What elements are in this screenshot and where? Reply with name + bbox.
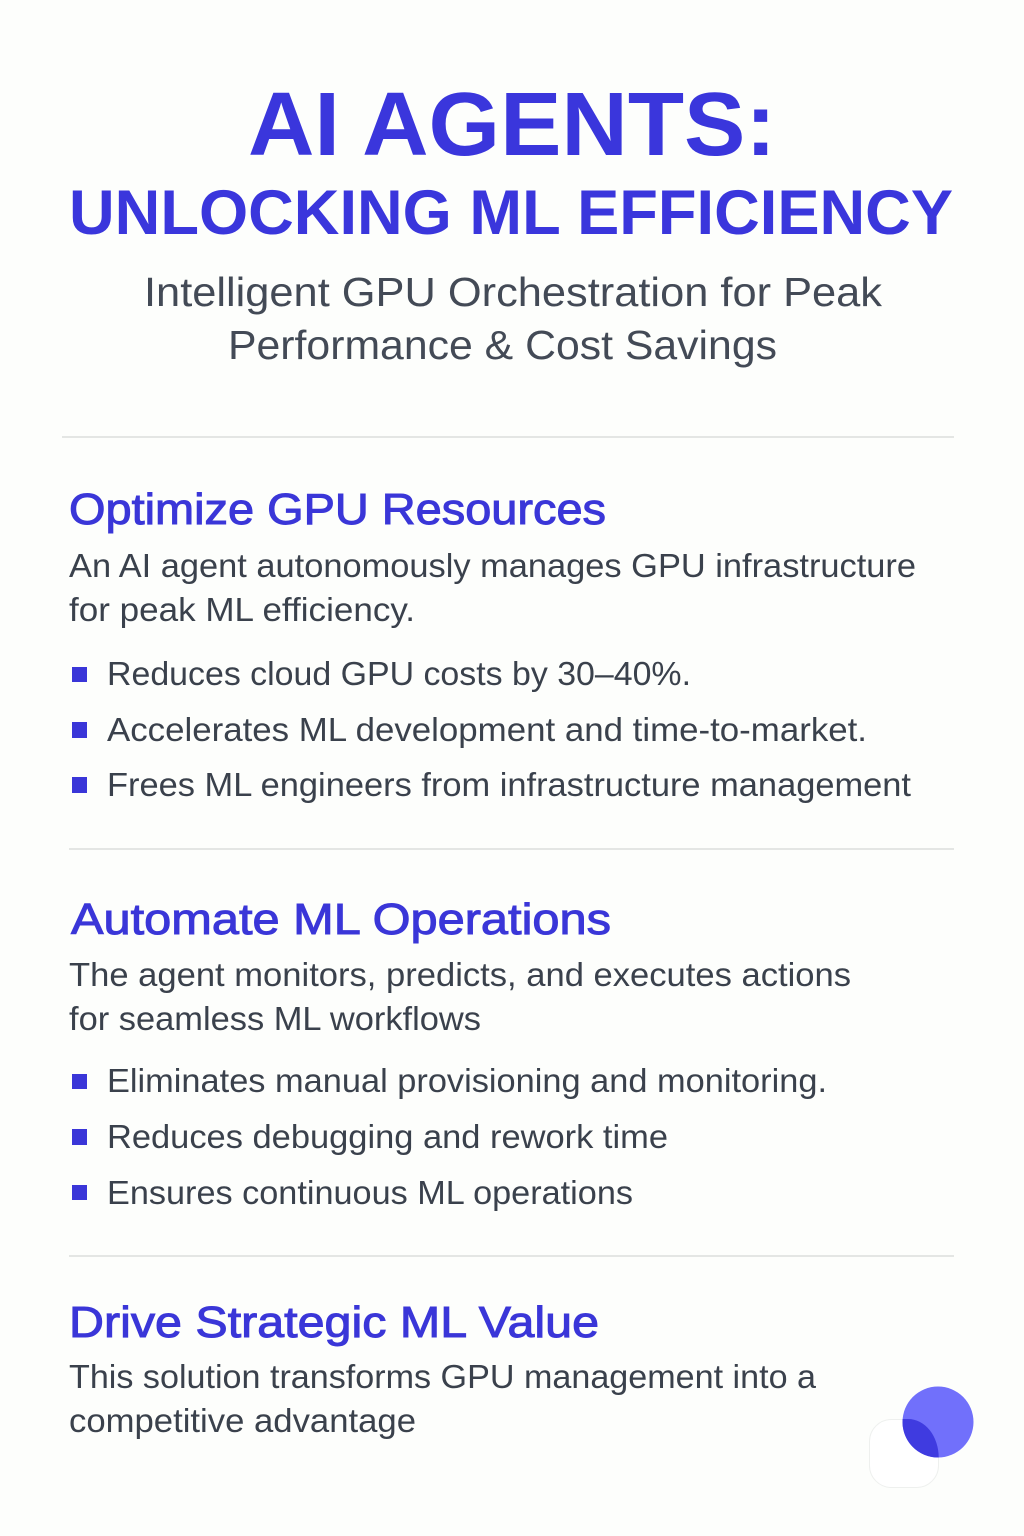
heading: automate ML operations: Automate ML Operations [71,895,611,944]
bullet: reduces costs: Reduces cloud GPU costs by 30–40%. [107,656,691,693]
text block: automate description: The agent monitors, predicts, and executes actions [69,957,851,994]
subtitle [144,269,883,368]
heading: optimize GPU resources: Optimize GPU Resources [69,485,606,534]
bullet: eliminates manual provisioning: Eliminates manual provisioning and monitoring. [107,1063,827,1100]
text block: automate description: for seamless ML workflows [69,1001,481,1038]
text block: optimize description: for peak ML efficiency. [69,592,415,629]
panel: optimize GPU resources [69,485,916,804]
heading: drive strategic ML value: Drive Strategic ML Value [69,1298,599,1347]
icon: overlapping rounded square and circle [870,1386,974,1488]
bullet: continuous operations: Ensures continuous ML operations [107,1175,633,1212]
text block: optimize description: An AI agent autonomously manages GPU infrastructure [69,548,916,585]
text block: optimize description [69,548,916,629]
text block: automate description [69,957,851,1038]
title [69,75,953,248]
title: AI AGENTS: [248,75,776,175]
title: UNLOCKING ML EFFICIENCY [69,178,953,248]
panel: automate ML operations [69,895,851,1212]
bullet: reduces debugging: Reduces debugging and rework time [107,1119,668,1156]
panel: drive strategic ML value [69,1298,816,1440]
text block: strategic description: competitive advantage [69,1403,416,1440]
text block: strategic description [69,1359,816,1440]
bullet: frees engineers: Frees ML engineers from infrastructure management [107,767,912,804]
bullet: accelerates development: Accelerates ML development and time-to-market. [107,712,867,749]
subtitle: Intelligent GPU Orchestration for Peak [144,269,883,315]
text block: strategic description: This solution transforms GPU management into a [69,1359,816,1396]
subtitle: Performance & Cost Savings [228,322,777,368]
